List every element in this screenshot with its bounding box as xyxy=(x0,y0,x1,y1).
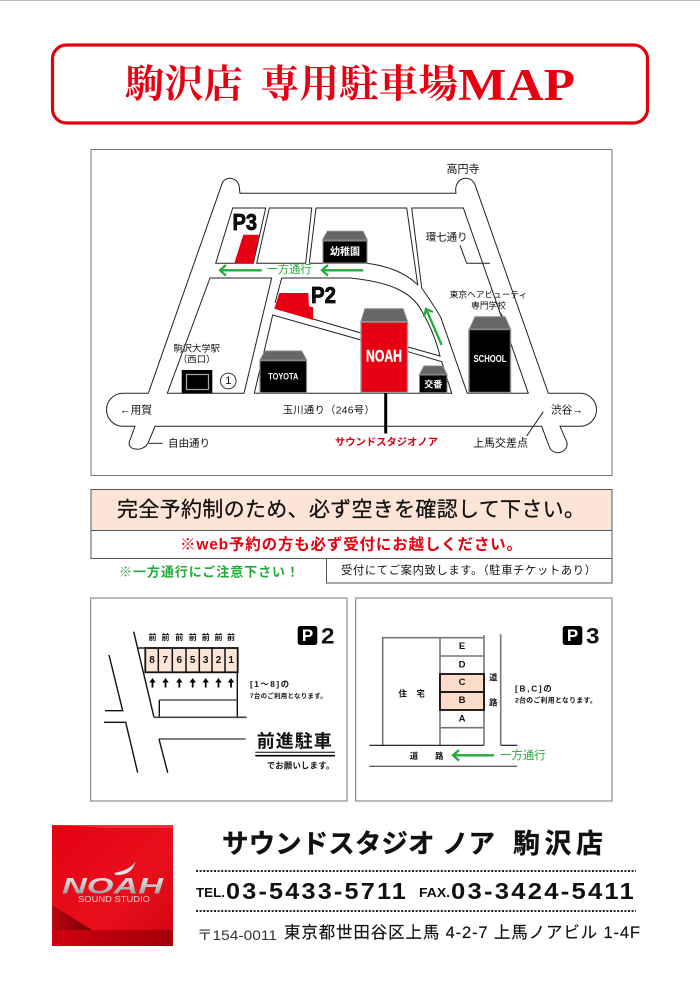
building: NOAH: NOAH xyxy=(366,346,402,366)
title banner: 駒沢店 xyxy=(123,64,243,106)
building: Toyota xyxy=(260,351,306,393)
P3 plot diagram: 路 xyxy=(435,751,444,761)
P2 note: 7台のご利用となります。 xyxy=(250,691,327,700)
icon: P2: 2 xyxy=(321,624,334,648)
building: kindergarten: 幼稚園 xyxy=(330,245,360,258)
notice: reservation: 完全予約制のため、必ず空きを確認して下さい。 xyxy=(117,498,585,522)
P3 note xyxy=(515,683,597,704)
pointer: studio xyxy=(384,393,387,434)
label P3: P3 xyxy=(232,209,257,235)
phone and fax: 03-5433-5711 xyxy=(226,878,408,904)
P3 plot diagram: B xyxy=(459,695,466,706)
red area P3 xyxy=(234,235,259,263)
P2 parking slots: 前 xyxy=(148,632,156,642)
label: Kannana dori: 環七通り xyxy=(426,231,468,243)
phone and fax: FAX. xyxy=(419,886,450,900)
P2 parking slots: 2 xyxy=(216,655,222,666)
address: 〒154-0011 xyxy=(197,927,277,943)
P3 plot diagram: 宅 xyxy=(417,688,425,698)
P2 parking slots: 前 xyxy=(202,632,210,642)
station: Komazawa Daigaku: 駒沢大学駅 xyxy=(173,343,220,354)
P2 parking slots: 前 xyxy=(175,632,183,642)
phone and fax: TEL. xyxy=(196,886,225,900)
one-way arrow: top road: 一方通行 xyxy=(267,262,312,276)
P3 plot diagram: C xyxy=(459,677,466,688)
logo: NOAH Sound Studio xyxy=(52,825,173,946)
P3 note: 2台のご利用となります。 xyxy=(515,696,597,704)
label: Kannana dori xyxy=(426,231,490,263)
icon: P2: P xyxy=(302,626,313,645)
P2 parking slots: 3 xyxy=(203,655,209,666)
P3 plot diagram: 道 xyxy=(410,751,419,761)
notice: one-way caution: ※一方通行にご注意下さい！ xyxy=(119,564,299,580)
title banner: MAP xyxy=(458,60,575,110)
P2 forward parking note: 前進駐車 xyxy=(257,732,332,752)
label: Koenji: 高円寺 xyxy=(446,162,480,176)
building: school xyxy=(469,317,510,392)
label: Tokyo Hair Beauty school: 東京ヘアビューティ xyxy=(450,288,527,300)
label: Kamiuma crossing xyxy=(473,412,543,450)
P2 parking slots: 8 xyxy=(149,655,155,666)
label: Jiyu dori: 自由通り xyxy=(168,436,210,449)
P2 parking slots: 1 xyxy=(228,655,234,666)
notice: web reservation: ※web予約の方も必ず受付にお越しください。 xyxy=(180,534,522,554)
P2 roads xyxy=(104,632,247,773)
red area P2 xyxy=(274,293,313,320)
label: Kamiuma crossing: 上馬交差点 xyxy=(473,436,528,450)
P2 note: [1～8]の xyxy=(250,679,289,689)
P2 forward arrows xyxy=(149,678,234,688)
dotted divider xyxy=(196,910,636,912)
logo: NOAH Sound Studio: SOUND STUDIO xyxy=(78,895,150,904)
P2 parking slots: 前 xyxy=(214,632,222,642)
map road outlines xyxy=(106,178,596,453)
icon: P3 xyxy=(563,624,600,648)
station: Komazawa Daigaku: （西口） xyxy=(178,354,215,364)
label: Tokyo Hair Beauty school: 専門学校 xyxy=(471,300,506,310)
address: 東京都世田谷区上馬 4-2-7 上馬ノアビル 1-4F xyxy=(284,923,640,942)
panel: P3 detail xyxy=(356,598,612,801)
store name: 駒沢店 xyxy=(513,829,603,859)
panel: area map xyxy=(91,150,612,476)
P3 plot diagram: 住 xyxy=(399,688,408,698)
store name: サウンドスタジオ ノア xyxy=(222,829,495,859)
label: Tamagawa dori: 玉川通り（246号） xyxy=(283,404,375,416)
building: Toyota: TOYOTA xyxy=(268,372,298,382)
label: studio name: サウンドスタジオノア xyxy=(335,436,438,448)
P3 plot diagram: A xyxy=(459,714,466,724)
label P2: P2 xyxy=(311,282,336,308)
building: school: SCHOOL xyxy=(474,354,506,365)
station: Komazawa Daigaku xyxy=(173,343,236,393)
one-way arrow: top road xyxy=(220,262,363,276)
icon: P2 xyxy=(298,624,334,648)
panel: P2 detail xyxy=(91,598,347,801)
P3 plot diagram: 道 xyxy=(489,672,498,682)
P2 parking slots: 前 xyxy=(162,632,170,642)
P3 note: [B,C]の xyxy=(515,683,552,693)
one-way arrow: curve xyxy=(424,309,442,345)
notice: reservation xyxy=(91,490,612,530)
P2 forward parking note xyxy=(255,732,335,771)
P2 parking slots: 6 xyxy=(177,655,183,666)
icon: P3: P xyxy=(567,626,578,645)
P2 forward parking note: でお願いします。 xyxy=(267,761,334,771)
label: Tokyo Hair Beauty school xyxy=(450,288,527,317)
label: Shibuya: 渋谷→ xyxy=(551,404,583,417)
logo: NOAH Sound Studio: NOAH xyxy=(62,874,165,898)
dotted divider xyxy=(196,870,636,872)
P3 plot diagram: D xyxy=(459,660,466,670)
P2 parking slots: 5 xyxy=(190,655,196,666)
P2 parking slots: 前 xyxy=(227,632,235,642)
one-way arrow: P3 xyxy=(453,748,546,762)
building: police box: 交番 xyxy=(424,378,442,390)
notice: web reservation xyxy=(91,530,612,558)
phone and fax: 03-3424-5411 xyxy=(451,878,636,904)
station: Komazawa Daigaku: 1 xyxy=(225,375,231,387)
one-way arrow: P3: 一方通行 xyxy=(500,748,546,762)
P3 plot diagram xyxy=(369,634,517,766)
phone and fax xyxy=(196,878,636,904)
P3 plot diagram: 路 xyxy=(489,697,498,707)
icon: P3: 3 xyxy=(586,624,600,648)
P2 parking slots: 前 xyxy=(189,632,197,642)
P2 parking slots: 7 xyxy=(163,655,169,666)
building: police box xyxy=(420,366,447,393)
label: Jiyu dori xyxy=(149,436,210,449)
label: Yoga: ←用賀 xyxy=(120,404,152,417)
P2 note xyxy=(250,679,327,700)
P2 parking slots xyxy=(145,632,238,672)
notice: reception: 受付にてご案内致します。（駐車チケットあり） xyxy=(341,563,596,577)
title banner xyxy=(52,45,648,123)
building: NOAH xyxy=(361,309,408,392)
P3 plot diagram: E xyxy=(459,641,465,652)
title banner: 専用駐車場 xyxy=(260,64,458,106)
notice: reception xyxy=(326,558,612,583)
building: kindergarten xyxy=(322,231,367,263)
